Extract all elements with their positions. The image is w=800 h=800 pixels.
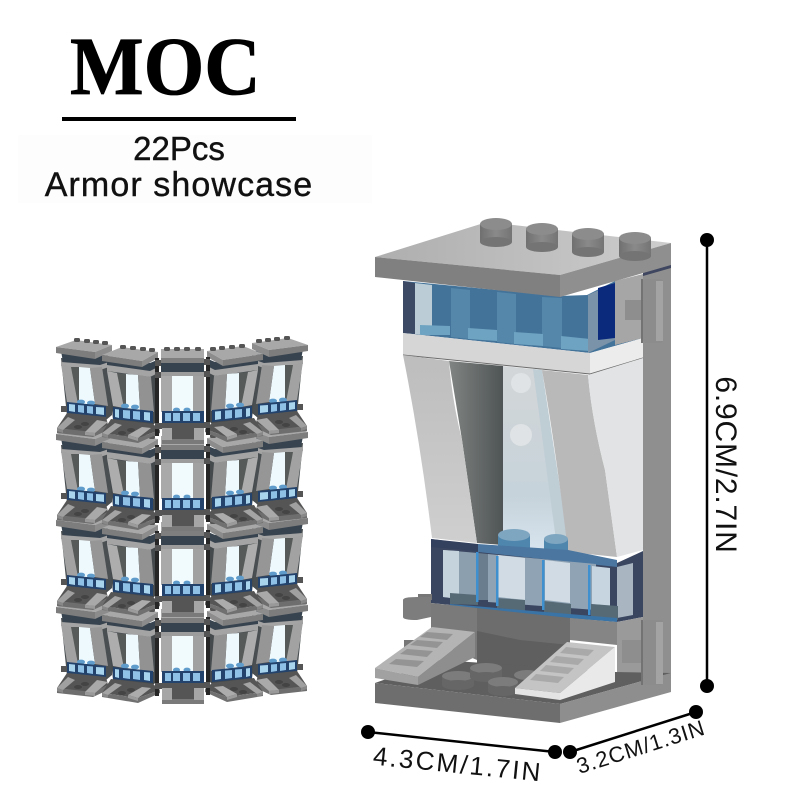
row 1	[56, 336, 308, 444]
depth dimension line	[563, 705, 703, 759]
row 4	[56, 596, 308, 704]
width label: 4.3CM/1.7IN	[372, 741, 544, 787]
inner dark wall	[449, 361, 503, 545]
base back walls	[431, 603, 643, 690]
piece count: 22Pcs	[133, 130, 225, 167]
base plate	[375, 660, 671, 723]
width dimension line	[361, 725, 562, 759]
right ramp	[515, 642, 615, 700]
upper right hinge clip	[625, 279, 663, 343]
stacked display of armor showcase modules	[56, 336, 308, 704]
subtitle backdrop	[18, 135, 372, 203]
height label: 6.9CM/2.7IN	[709, 376, 742, 554]
base studs	[442, 663, 540, 696]
roof studs	[480, 218, 651, 261]
row 3	[56, 509, 308, 617]
center translucent panel	[503, 366, 568, 552]
left side clip	[403, 594, 432, 648]
height dimension line	[700, 233, 714, 693]
back column	[643, 256, 671, 688]
white band under window	[403, 333, 643, 374]
right leg side	[588, 358, 643, 557]
right leg front	[542, 370, 617, 557]
title underline	[62, 117, 296, 121]
large armor showcase module	[375, 218, 671, 723]
product name: Armor showcase	[45, 166, 313, 204]
lower right hinge clip	[622, 620, 663, 685]
depth label: 3.2CM/1.3IN	[573, 715, 708, 779]
left leg	[403, 355, 477, 543]
left ramp	[375, 627, 475, 685]
lower transparent blue window	[431, 529, 643, 622]
upper transparent blue window	[403, 259, 671, 353]
row 2	[56, 423, 308, 531]
roof plate	[375, 222, 671, 297]
title: MOC	[70, 21, 261, 113]
